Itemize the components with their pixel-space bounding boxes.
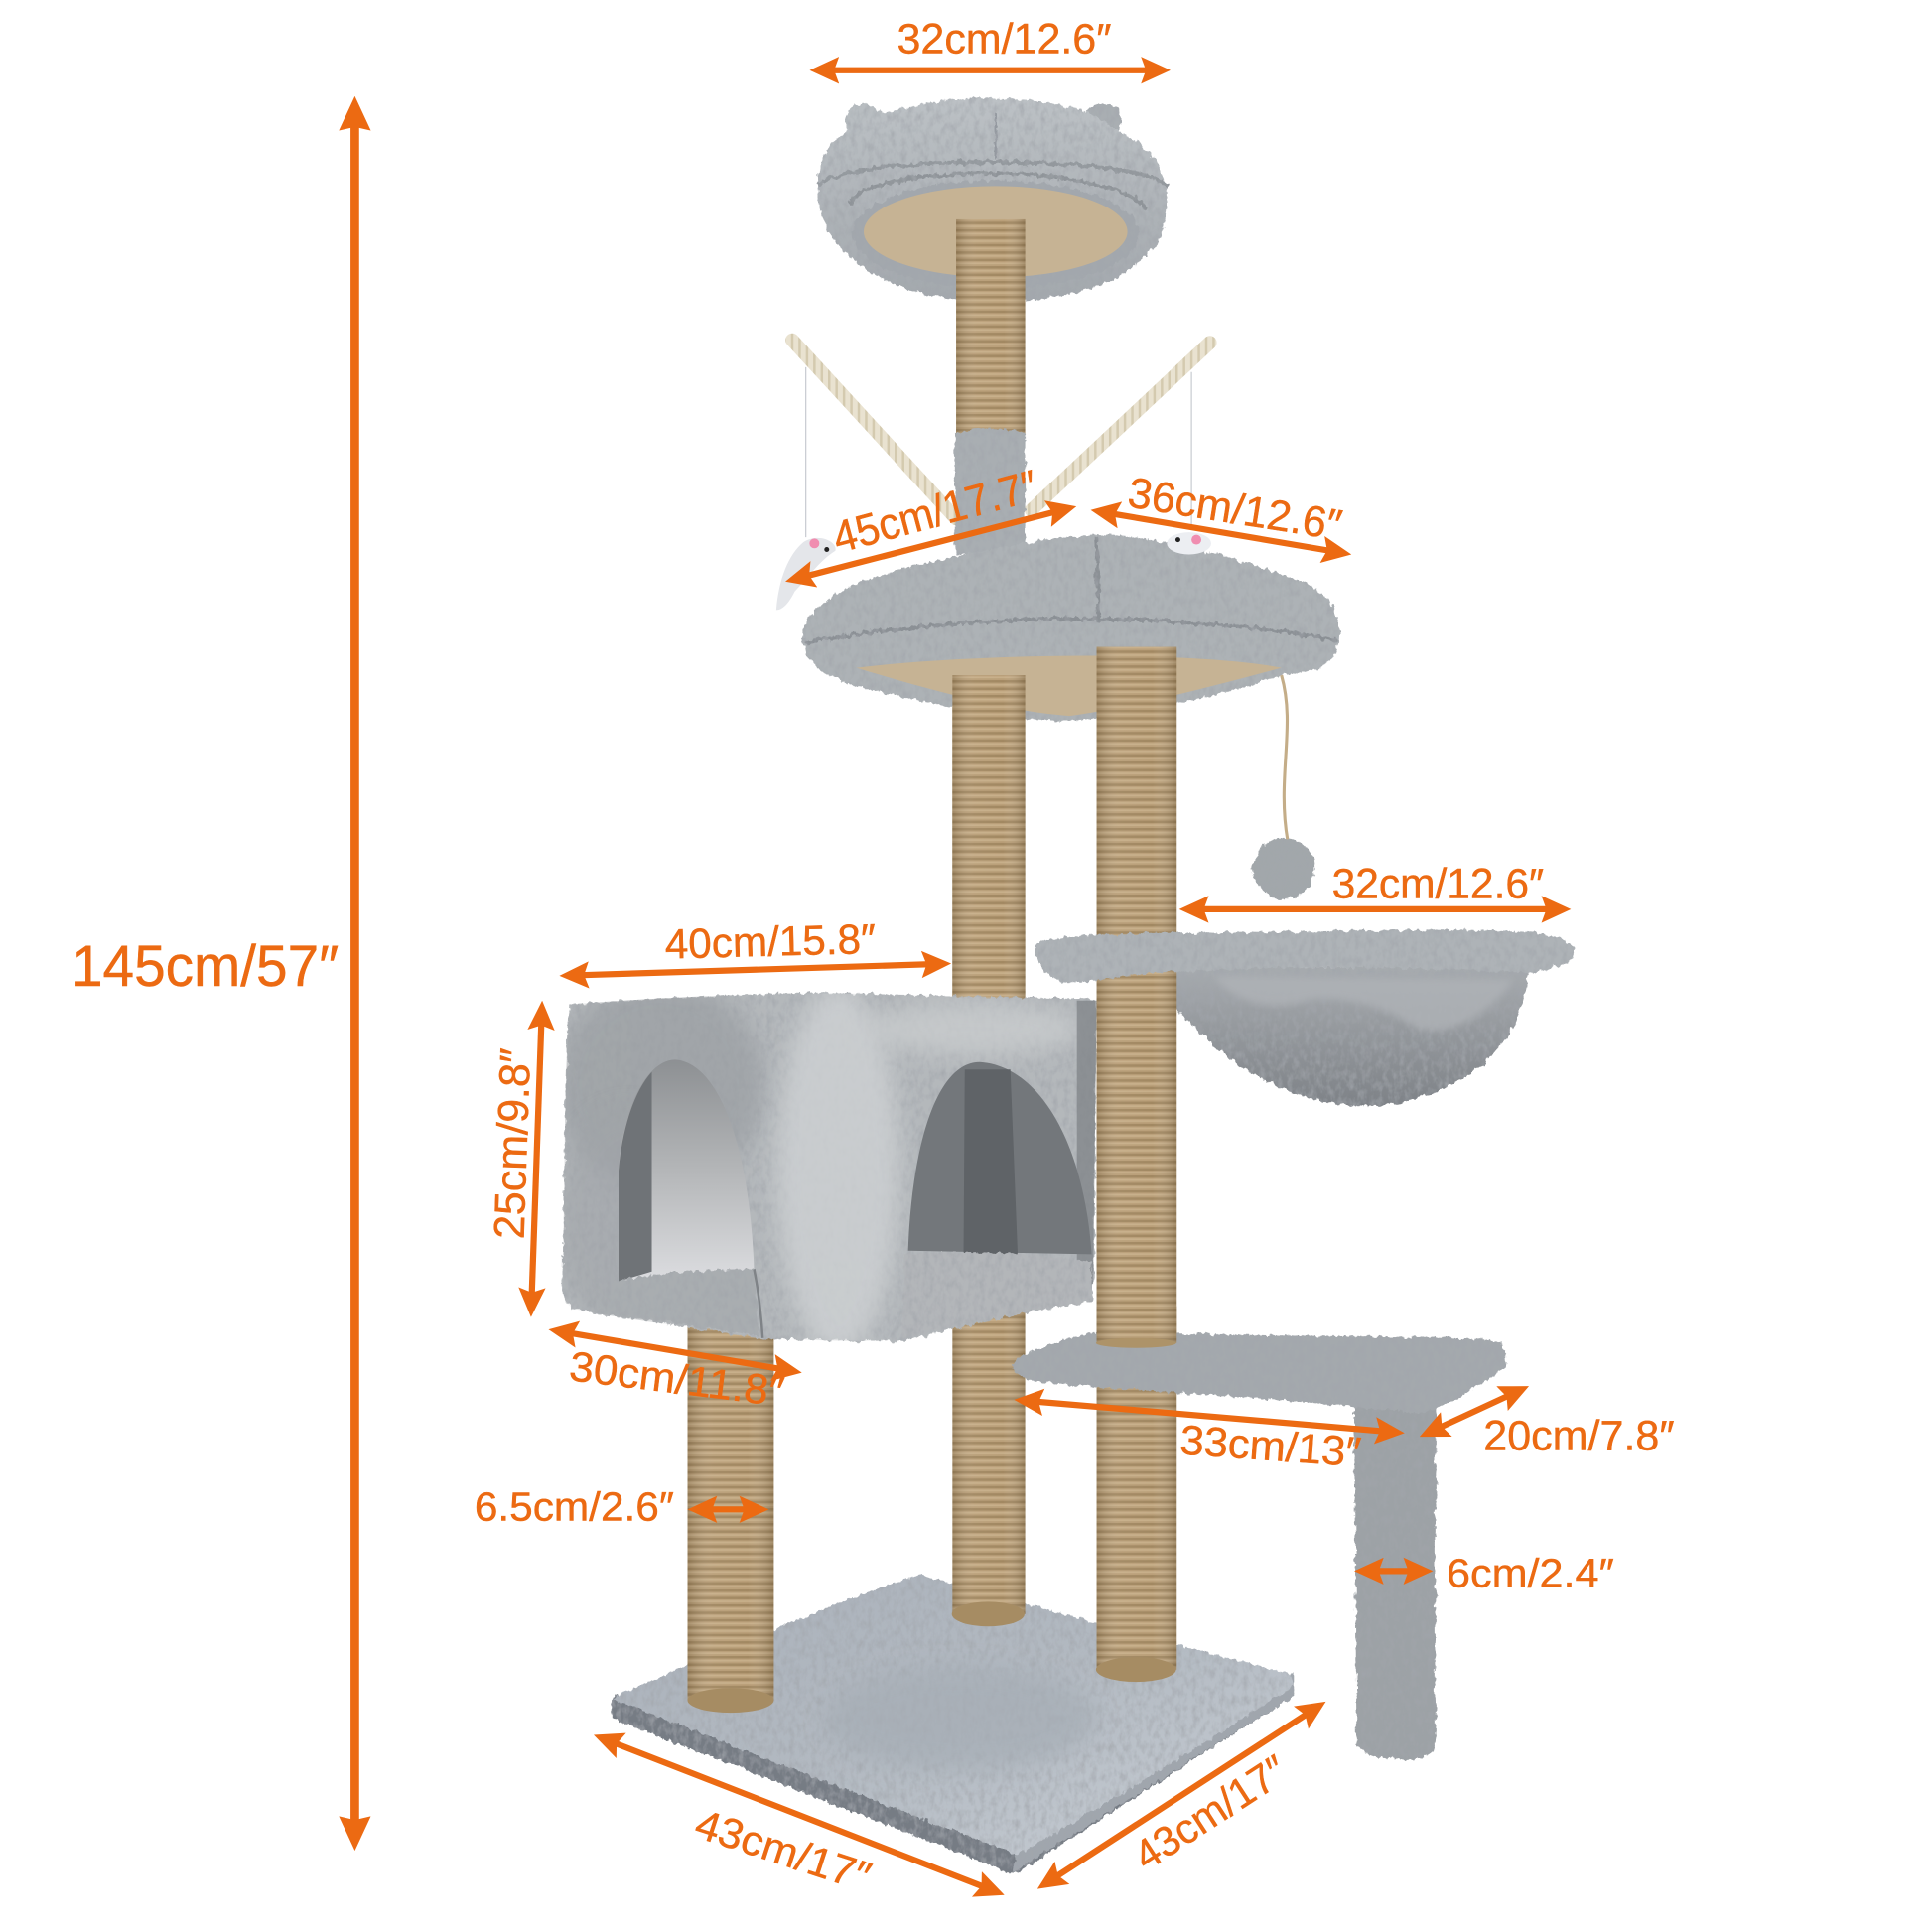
- arrow: total height: [351, 113, 358, 1834]
- dimension: house height: 25cm/9.8″: [485, 1047, 540, 1240]
- center post under platform: [952, 675, 1026, 1008]
- perch underside board: [864, 186, 1128, 277]
- dimension: house width: 40cm/15.8″: [664, 915, 877, 968]
- dimension: house height: [485, 1016, 542, 1303]
- cat tree product illustration: [554, 98, 1575, 1872]
- dimension: platform depth 36cm: 36cm/12.6″: [1125, 470, 1345, 550]
- gray sleeve on post: [955, 428, 1026, 554]
- label: total height: 145cm/57″: [71, 934, 339, 999]
- toy mouse right: [1167, 532, 1211, 554]
- center sisal post: [952, 675, 1026, 1626]
- hammock rim: [1035, 930, 1575, 983]
- right sisal post lower part: [1096, 1355, 1176, 1682]
- right post foot on shelf: [1096, 1307, 1176, 1348]
- dimension: shelf width: [1029, 1401, 1390, 1475]
- dimension: base length left: 43cm/17″: [690, 1800, 877, 1900]
- house: [554, 980, 1097, 1355]
- dimension: house depth: 30cm/11.8″: [567, 1342, 786, 1415]
- dimension: shelf depth: [1433, 1392, 1675, 1459]
- dimension: platform width 45cm: 45cm/17.7″: [828, 462, 1042, 563]
- platform underside board: [857, 656, 1282, 716]
- front left sisal post: [688, 1318, 773, 1713]
- dimension: base length right: [1049, 1710, 1313, 1880]
- toy mouse left: [776, 538, 836, 610]
- top perch bed: [818, 98, 1168, 435]
- hanging strings: [806, 367, 1191, 537]
- dimension: base length right: 43cm/17″: [1126, 1746, 1296, 1879]
- pompom ball toy: [1253, 675, 1314, 899]
- dimension: house width: [574, 915, 936, 975]
- dimension: hammock width: 32cm/12.6″: [1332, 861, 1544, 907]
- dimension: top perch width: 32cm/12.6″: [897, 15, 1112, 62]
- dimension: leg diameter: 6cm/2.4″: [1447, 1550, 1614, 1595]
- sisal stick left: [792, 341, 956, 518]
- hammock bowl: [1146, 967, 1528, 1106]
- dimension: post diameter: 6.5cm/2.6″: [475, 1483, 674, 1529]
- left arch opening: [607, 1059, 762, 1338]
- right sisal post upper part: [1097, 647, 1176, 1343]
- lower shelf: [1013, 1307, 1506, 1414]
- perch post: [956, 219, 1026, 435]
- middle platform: [803, 535, 1339, 721]
- right arch opening: [901, 1062, 1092, 1339]
- base platform: [613, 1575, 1294, 1872]
- dimension: shelf depth: 20cm/7.8″: [1483, 1413, 1675, 1459]
- dimension: base length left: [608, 1740, 991, 1900]
- sisal stick right: [1032, 343, 1210, 510]
- right leg post: [1354, 1405, 1436, 1760]
- dimension: shelf width: 33cm/13″: [1178, 1417, 1362, 1475]
